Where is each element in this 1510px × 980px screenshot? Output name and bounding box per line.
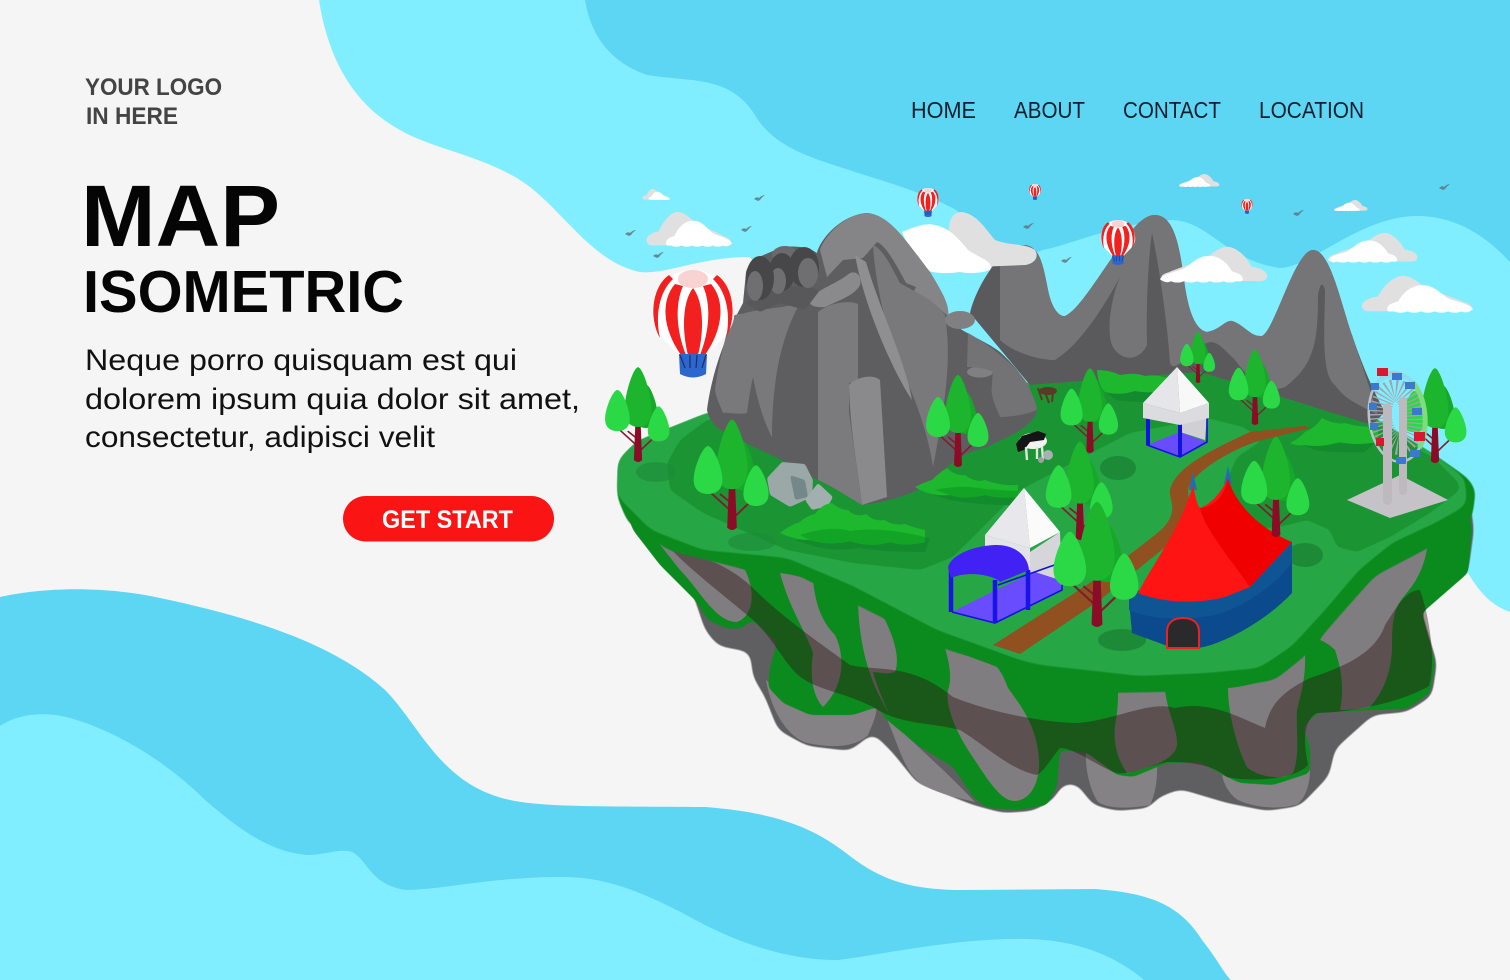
bush: right: [1290, 418, 1378, 452]
grass surface dark: [667, 372, 1460, 570]
mountain range light faces: [1000, 215, 1378, 415]
description text: [85, 344, 580, 454]
green vine drape: [620, 493, 1472, 810]
exposed rock windows: [650, 532, 1428, 801]
background wave: top darker blue: [585, 0, 1510, 268]
mountain range: [970, 215, 1385, 425]
small ledge and stump: [945, 311, 1037, 417]
background wave: bottom darker blue: [0, 589, 1231, 980]
cow: brown: [1038, 387, 1057, 403]
cloud: behind massif: [902, 212, 1037, 273]
dirt path: [993, 426, 1310, 654]
grass surface light: [617, 368, 1467, 676]
navigation menu: CONTACT: [1123, 97, 1221, 123]
boulders: [767, 462, 833, 510]
navigation menu: [911, 97, 1364, 123]
massif silhouette: [707, 213, 1037, 505]
description text: consectetur, adipisci velit: [85, 421, 436, 454]
cow: black and white: [1016, 431, 1053, 463]
logo text: [85, 74, 222, 130]
button: get start: GET START: [382, 506, 513, 534]
lighter rock lobes: [766, 680, 1310, 808]
blue arch tent: [948, 545, 1062, 623]
bush: back: [1097, 370, 1167, 402]
bush: middle: [915, 468, 1020, 505]
button: get start: [343, 496, 554, 542]
logo text: IN HERE: [86, 103, 178, 130]
title: [81, 168, 404, 325]
title: MAP: [81, 168, 280, 265]
description text: Neque porro quisquam est qui: [85, 344, 517, 377]
massif left flank: [715, 303, 800, 437]
rock ledge: [810, 272, 861, 307]
navigation menu: ABOUT: [1014, 97, 1085, 123]
clouds: front of the range: [902, 212, 1267, 283]
bush: left front: [780, 503, 930, 552]
small white tent: [1143, 367, 1209, 457]
mountain range dark base: [970, 215, 1385, 425]
navigation menu: HOME: [911, 97, 976, 123]
background wave: bottom light blue: [0, 714, 1144, 980]
navigation menu: LOCATION: [1259, 97, 1364, 123]
rock pillar short: [849, 377, 887, 505]
title: ISOMETRIC: [83, 259, 404, 325]
red circus tent: [1129, 466, 1292, 648]
background wave: top light blue: [319, 0, 1510, 620]
clouds: background: [642, 174, 1473, 313]
massif lit dome: [820, 213, 948, 316]
trees: back row: [605, 331, 1466, 530]
floating island: [617, 368, 1476, 813]
island rim: [617, 368, 1476, 693]
hot air balloon: medium: [1101, 220, 1135, 265]
underside shadow band: [670, 548, 1432, 779]
large white tent: [985, 488, 1062, 590]
massif right flank: [873, 245, 948, 467]
front trees: [1046, 437, 1309, 627]
island underside rock: [620, 490, 1474, 813]
tree shadows: [636, 456, 1323, 651]
description text: dolorem ipsum quia dolor sit amet,: [85, 383, 580, 416]
hot air balloon: large: [652, 270, 734, 378]
massif highlight streak: [855, 255, 912, 400]
ferris wheel: [1347, 368, 1448, 518]
distant hot air balloons: [917, 184, 1253, 217]
rock pillar tall: [818, 302, 862, 505]
central rock massif: [707, 213, 1037, 505]
carved heads: [745, 246, 820, 312]
birds: [625, 184, 1450, 263]
cloud: right of the second peak: [1160, 247, 1267, 283]
logo text: YOUR LOGO: [85, 74, 222, 101]
